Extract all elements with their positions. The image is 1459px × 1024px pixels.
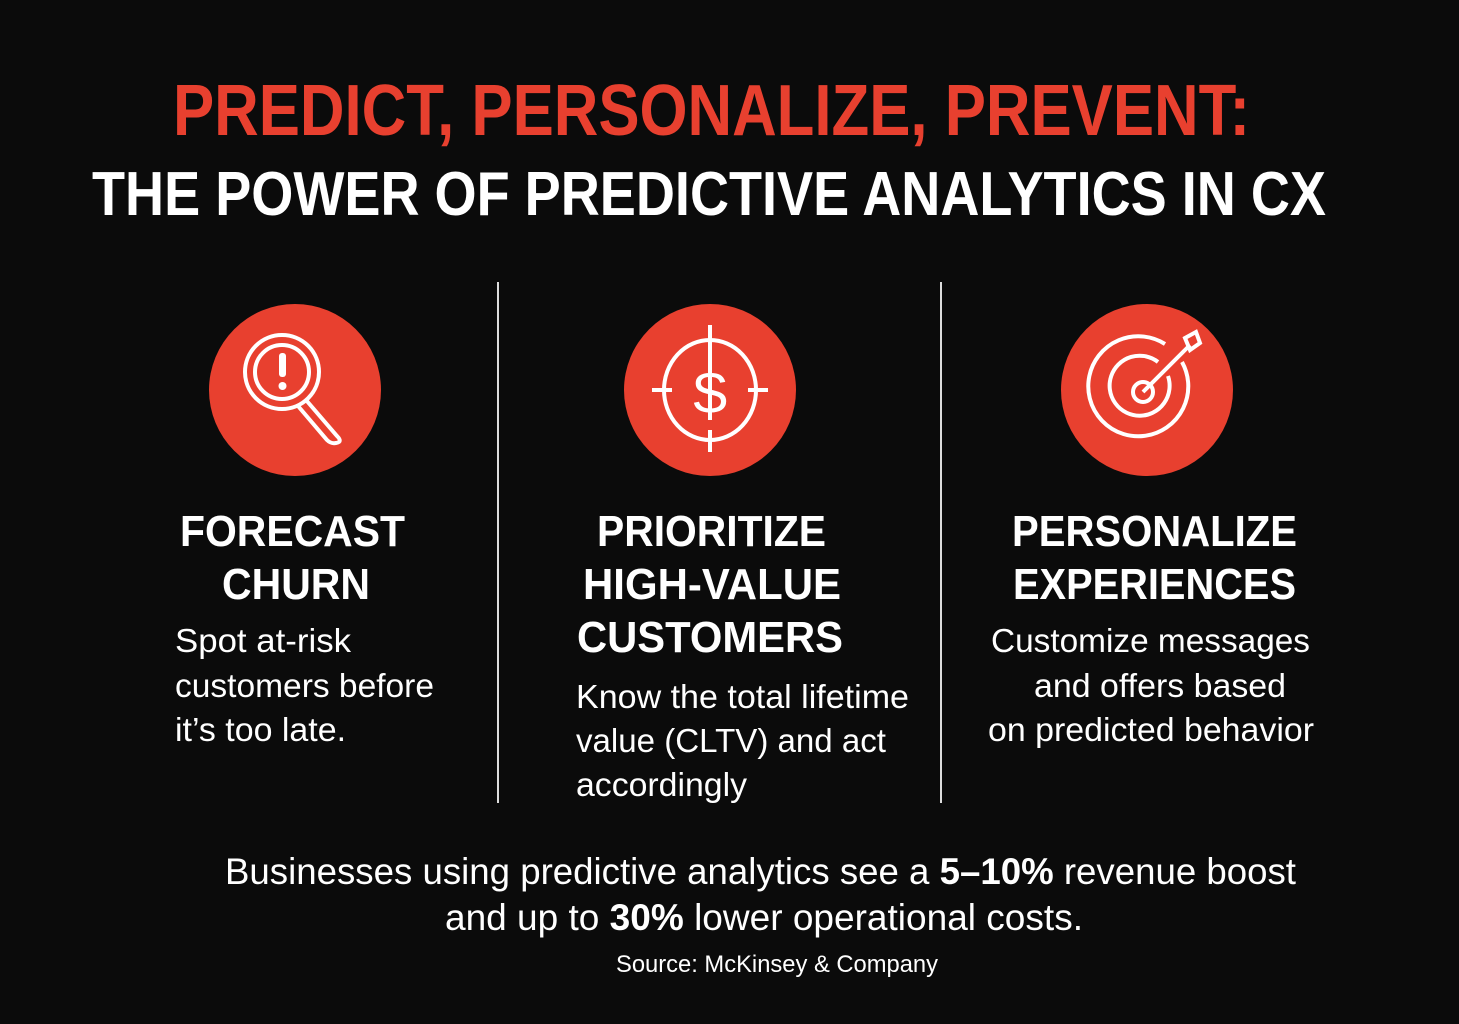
text block: customers before [175,667,434,704]
heading: PRIORITIZE [597,507,826,556]
heading: CUSTOMERS [577,613,843,662]
text block: Know the total lifetime [576,678,909,715]
heading: EXPERIENCES [1013,560,1296,609]
callout: statistic [225,851,1297,938]
icon: target arrow [1061,304,1233,476]
icon: magnifier alert [209,304,381,476]
text block: Spot at-risk [175,622,352,659]
title [92,71,1326,229]
source: Source: McKinsey & Company [616,951,938,978]
text block: value (CLTV) and act [576,722,886,759]
text block: Customize messages [991,622,1310,659]
heading: PERSONALIZE [1012,507,1297,556]
panel: forecast churn [175,304,434,748]
text block: and offers based [1034,667,1286,704]
callout: statistic: and up to 30% lower operational costs. [445,897,1083,938]
panel: prioritize [576,304,909,803]
panel: personalize [988,304,1314,748]
text block [175,622,434,748]
text block [988,622,1314,748]
text block [576,678,909,803]
heading [180,507,405,609]
heading: FORECAST [180,507,405,556]
icon: dollar target [624,304,796,476]
text block: it’s too late. [175,711,346,748]
callout: statistic: Businesses using predictive analytics see a 5–10% revenue boost [225,851,1297,892]
text block: on predicted behavior [988,711,1314,748]
heading: CHURN [222,560,370,609]
title: PREDICT, PERSONALIZE, PREVENT: [173,71,1250,151]
heading: HIGH-VALUE [583,560,841,609]
heading [1012,507,1297,609]
text block: accordingly [576,766,748,803]
icon: dollar target: S [691,361,729,424]
heading [577,507,843,662]
